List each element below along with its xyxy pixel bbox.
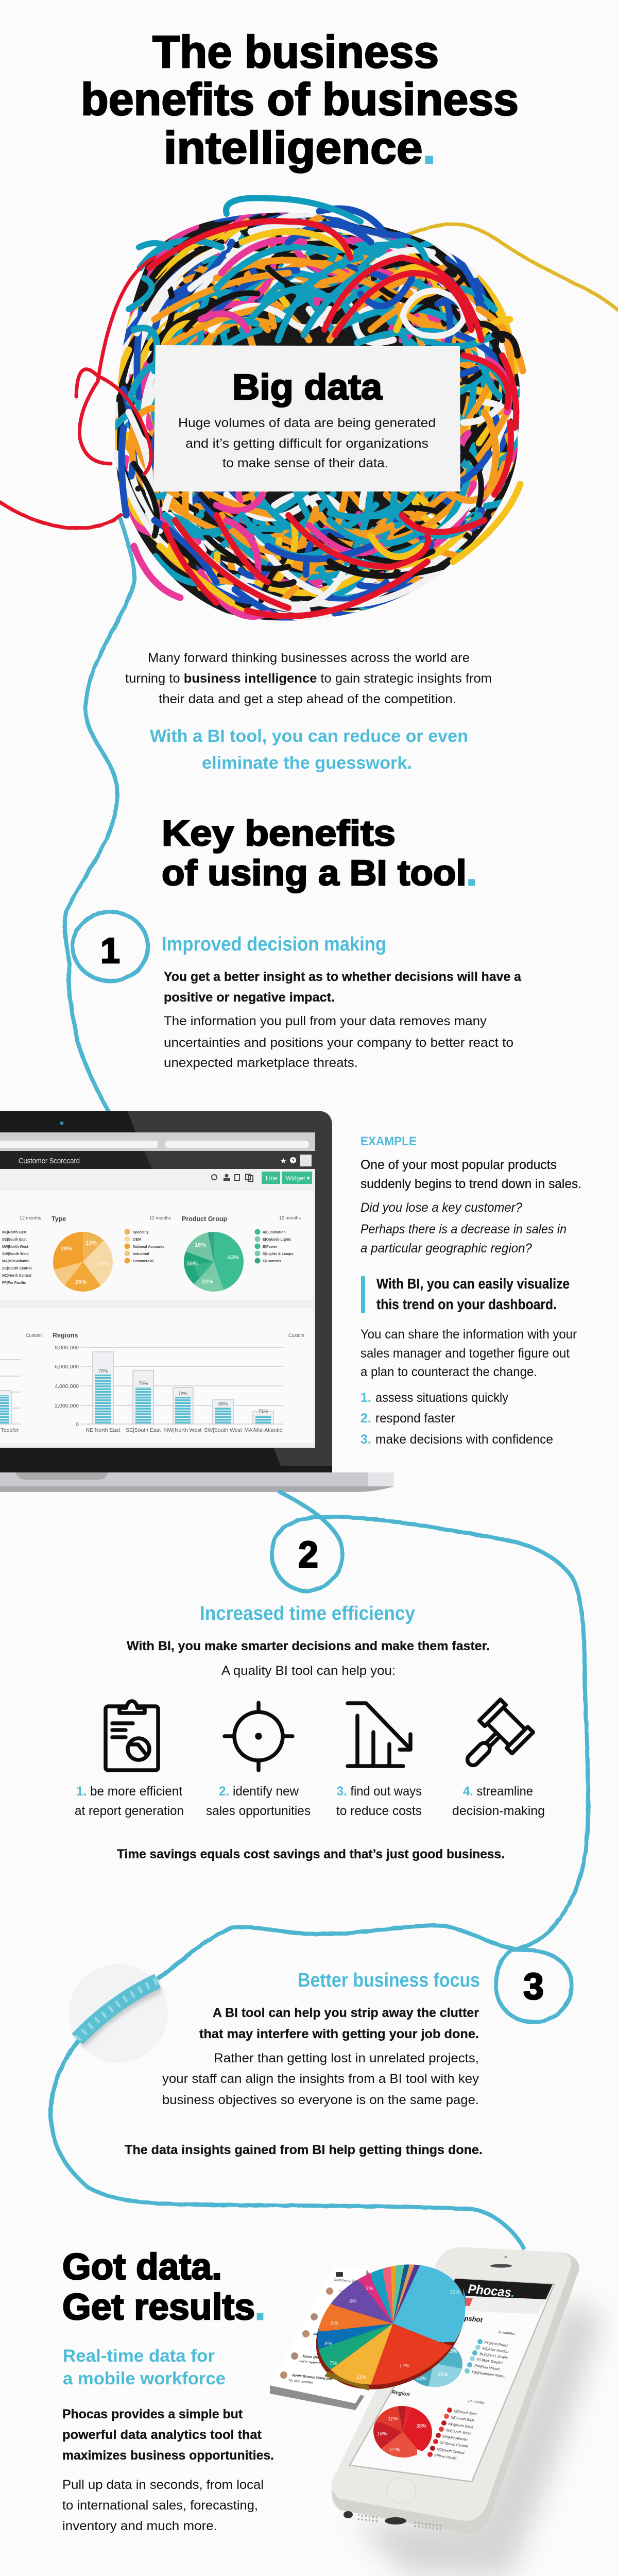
teal legend on phone: RT|Rick Toepfer <box>477 2358 503 2365</box>
dashboard panel: regions bar chart: NE|North East <box>86 1427 121 1433</box>
benefit 2 text: Increased time efficiency <box>200 1603 415 1624</box>
teal string: laptop through loop 2 to loop 3 <box>158 1491 588 2022</box>
pie: product group: 16% <box>195 1242 206 1248</box>
comments card <box>270 2267 372 2410</box>
legend: type: Industrial <box>133 1252 149 1256</box>
teal pie on phone <box>413 2346 462 2387</box>
numbered list <box>360 1391 553 1447</box>
highlight callout: this trend on your dashboard. <box>376 1296 557 1312</box>
red pie on phone <box>373 2406 432 2458</box>
phone shadow <box>355 2298 603 2576</box>
benefit 1 text <box>162 934 522 1070</box>
pie: type: 25% <box>75 1279 87 1285</box>
example column: sales manager and together figure out <box>360 1346 570 1361</box>
dashboard panel: regions bar chart: 65% <box>218 1401 228 1406</box>
closing statement: The data insights gained from BI help getting things done. <box>125 2143 483 2157</box>
legend: type: OEM <box>133 1238 141 1242</box>
benefit 2 text <box>127 1603 490 1678</box>
heading: got data: Got data. <box>62 2247 222 2287</box>
region list: SW|South West <box>2 1252 29 1256</box>
teal pie on phone: 25% <box>447 2349 457 2354</box>
example column: Did you lose a key customer? <box>360 1200 522 1215</box>
highlight callout <box>361 1276 570 1313</box>
intro paragraph: turning to business intelligence to gain strategic insights from <box>125 671 492 686</box>
number 3: 3 <box>523 1966 544 2007</box>
paper card: big data <box>153 345 460 492</box>
pie: type: 13% <box>85 1240 97 1246</box>
title: intelligence. <box>164 122 436 173</box>
legend: product group: B|Power <box>263 1245 277 1249</box>
laptop base <box>0 1472 394 1492</box>
card heading: Big data <box>232 367 383 407</box>
comments card: Jamie Brooks Good job <box>291 2374 332 2381</box>
example column: One of your most popular products <box>360 1158 557 1172</box>
comments card: Write a comment <box>339 2290 367 2295</box>
laptop lid <box>0 1111 332 1472</box>
icon: declining chart <box>348 1703 410 1766</box>
dashboard panel: regions bar chart: Toepfer <box>1 1427 19 1433</box>
numbered list: assess situations quickly <box>375 1391 508 1405</box>
card text: and it’s getting difficult for organizations <box>185 436 428 451</box>
yarn strands <box>116 209 523 616</box>
teal legend on phone: BLE|Bert L Evans <box>479 2352 508 2360</box>
example column: a particular geographic region? <box>360 1241 532 1256</box>
phocas description: to international sales, forecasting, <box>62 2498 258 2513</box>
comments card: we’re behind <box>299 2360 320 2365</box>
dashboard panel: pies: Type <box>52 1215 66 1223</box>
legend: product group: C|Controls <box>263 1260 281 1263</box>
icon captions <box>75 1784 545 1818</box>
red legend on phone: NC|North Central <box>437 2448 465 2455</box>
icon captions: to reduce costs <box>336 1804 422 1818</box>
benefit 1 text: positive or negative impact. <box>164 990 335 1005</box>
pie: product group: 16% <box>186 1261 198 1267</box>
red legend on phone: NE|North East <box>454 2410 477 2416</box>
dashboard panel: regions bar chart <box>0 1308 313 1443</box>
teal pie on phone: 23% <box>437 2372 448 2378</box>
phone header: apshot <box>460 2314 483 2324</box>
legend: type <box>125 1229 164 1263</box>
benefit 3 text: Rather than getting lost in unrelated projects, <box>214 2051 479 2065</box>
3D pie chart: 17% <box>399 2363 409 2369</box>
dashboard panel: regions bar chart: NW|North West <box>164 1427 201 1433</box>
phocas description: powerful data analytics tool that <box>62 2428 262 2442</box>
teal legend on phone <box>465 2330 516 2379</box>
heading: got data <box>62 2247 265 2328</box>
example column <box>360 1134 581 1447</box>
screen background <box>0 1187 315 1448</box>
time savings statement: Time savings equals cost savings and that’s just good business. <box>117 1847 505 1861</box>
example column: a plan to counteract the change. <box>360 1365 537 1379</box>
red pie on phone: 35% <box>416 2424 426 2429</box>
highlight callout: With BI, you can easily visualize <box>376 1276 570 1292</box>
pie: type: 26% <box>98 1261 109 1267</box>
icon captions: at report generation <box>75 1804 184 1818</box>
example column: Perhaps there is a decrease in sales in <box>360 1222 566 1236</box>
3D pie chart: 6% <box>349 2299 357 2304</box>
3D pie chart: 7% <box>330 2361 337 2366</box>
icon captions: 4. streamline <box>463 1784 533 1799</box>
benefit 3 text: Better business focus <box>298 1970 480 1991</box>
browser chrome <box>0 1132 315 1151</box>
subheading: mobile workforce <box>63 2346 226 2388</box>
dashboard panel: regions bar chart: 4,000,000 <box>55 1383 79 1389</box>
phone <box>331 2247 603 2576</box>
region list: FP|Far Pacific <box>2 1281 26 1285</box>
comments card: Tim L. <box>323 2314 334 2319</box>
red pie on phone: 27% <box>389 2447 400 2453</box>
icon captions: 3. find out ways <box>337 1784 422 1799</box>
number 1 loop: 1 <box>100 930 120 971</box>
ball base <box>115 213 520 620</box>
example column: You can share the information with your <box>360 1327 577 1342</box>
dashboard panel: regions bar chart: SW|South West <box>204 1427 242 1433</box>
region list: NW|North West <box>2 1245 28 1249</box>
dashboard panel: regions bar chart: 8,000,000 <box>55 1345 79 1351</box>
region list: MA|Mid-Atlantic <box>2 1260 29 1263</box>
dashboard panel: regions bar chart: 2,000,000 <box>55 1403 79 1409</box>
dashboard panel: pies: Product Group <box>182 1215 228 1223</box>
laptop <box>0 1111 394 1492</box>
benefit 3 text <box>162 1970 480 2107</box>
card text: Huge volumes of data are being generated <box>178 416 436 430</box>
region list: SE|South East <box>2 1238 27 1242</box>
benefit 1 text: unexpected marketplace threats. <box>164 1056 358 1070</box>
dashboard panel: regions bar chart: Custom <box>288 1333 304 1338</box>
legend: type: National Accounts <box>133 1245 164 1249</box>
phone: Region <box>391 2389 410 2398</box>
teal legend on phone: PM|Paul Magee <box>474 2364 500 2371</box>
legend: type: Specialty <box>133 1231 149 1234</box>
phone screen <box>350 2279 554 2482</box>
icon captions: 2. identify new <box>219 1784 299 1799</box>
teal statement <box>150 726 468 773</box>
toolbar: Widget ▾ <box>286 1175 310 1182</box>
toolbar: Line <box>266 1175 278 1182</box>
phocas description <box>62 2407 274 2533</box>
pie: type <box>53 1232 113 1292</box>
benefit 1 text: uncertainties and positions your company to better react to <box>164 1036 513 1050</box>
numbered list: respond faster <box>375 1411 455 1426</box>
phone body <box>332 2247 579 2534</box>
number 1 loop <box>73 912 148 981</box>
legend: product group <box>254 1229 294 1263</box>
phone header <box>440 2279 553 2324</box>
3D pie chart: 6% <box>331 2320 338 2326</box>
benefit 3 text: business objectives so everyone is on the same page. <box>162 2093 479 2107</box>
yarn ball <box>0 195 618 620</box>
heading: key benefits <box>162 813 477 893</box>
numbered list: 2. <box>360 1411 371 1426</box>
red legend on phone <box>427 2408 477 2461</box>
dashboard panel: pies: 12 months <box>279 1215 301 1221</box>
red legend on phone: SE|South East <box>451 2416 475 2422</box>
icon captions: sales opportunities <box>206 1804 311 1818</box>
icon: gavel <box>453 1700 533 1780</box>
benefit 2 text: A quality BI tool can help you: <box>221 1664 396 1678</box>
dashboard panel: regions bar chart: 72% <box>178 1391 187 1396</box>
comments card: Jamie <box>313 2332 323 2337</box>
dashboard panel: regions bar chart: SE|South East <box>126 1427 161 1433</box>
3D pie chart <box>316 2264 466 2391</box>
region list <box>2 1231 32 1285</box>
benefit 2 text: With BI, you make smarter decisions and make them faster. <box>127 1639 490 1653</box>
region list: NC|North Central <box>2 1274 31 1278</box>
benefit 1 text: You get a better insight as to whether decisions will have a <box>164 970 522 984</box>
example column: suddenly begins to trend down in sales. <box>360 1177 581 1191</box>
comments card: for this quarter! <box>289 2379 313 2385</box>
numbered list: make decisions with confidence <box>375 1432 553 1447</box>
red legend on phone: MA|Mid-Atlantic <box>442 2435 468 2442</box>
dashboard panel: pies: 12 months <box>20 1215 42 1221</box>
3D pie chart: 8% <box>324 2341 332 2347</box>
phone: 12 months <box>468 2399 485 2405</box>
dashboard panel: regions bar chart: Custom <box>26 1333 42 1338</box>
dashboard panel: regions bar chart: 70% <box>98 1368 108 1374</box>
intro paragraph: Many forward thinking businesses across the world are <box>148 651 470 665</box>
benefit 3 text: that may interfere with getting your job done. <box>199 2027 479 2041</box>
heading: got data: Get results. <box>62 2287 265 2328</box>
benefit 3 text: A BI tool can help you strip away the clutter <box>213 2006 479 2020</box>
numbered list: 1. <box>360 1391 371 1405</box>
title: benefits of business <box>81 74 519 125</box>
app header <box>0 1151 315 1169</box>
red legend on phone: FP|Far Pacific <box>434 2454 457 2461</box>
dashboard panel: regions bar chart: 70% <box>139 1381 148 1386</box>
dense yarn fill <box>115 212 520 620</box>
phone header: Phocas. <box>467 2282 516 2300</box>
phocas description: Phocas provides a simple but <box>62 2407 243 2421</box>
teal pie on phone: 14% <box>416 2376 426 2382</box>
numbered list: 3. <box>360 1432 371 1447</box>
icon: clipboard report <box>106 1701 158 1770</box>
phocas description: inventory and much more. <box>62 2519 217 2533</box>
benefit 1 text: Improved decision making <box>162 934 386 955</box>
card text: to make sense of their data. <box>222 456 388 470</box>
pie: product group <box>184 1232 244 1292</box>
app header: Customer Scorecard <box>19 1157 80 1165</box>
3D pie chart: 11% <box>356 2375 366 2380</box>
app header: ★ <box>280 1157 287 1165</box>
intro paragraph <box>125 651 492 706</box>
icon captions: 1. be more efficient <box>76 1784 182 1799</box>
title <box>81 26 519 173</box>
legend: type: Commercial <box>133 1260 153 1263</box>
title: The business <box>152 26 439 77</box>
number 2: 2 <box>298 1534 318 1575</box>
card text <box>178 416 436 470</box>
legend: product group: D|Lights & Lamps <box>263 1252 294 1256</box>
yarn tails <box>0 224 618 528</box>
dashboard panel: regions bar chart: Regions <box>53 1332 78 1339</box>
pie: product group: 22% <box>202 1279 213 1285</box>
dashboard panel: regions bar chart: 0 <box>76 1421 79 1428</box>
subheading: mobile workforce: Real-time data for <box>63 2346 215 2366</box>
teal string: ball to laptop <box>65 515 134 1113</box>
toolbar <box>0 1169 315 1187</box>
phone hardware <box>344 2256 512 2530</box>
3D pie chart: 3% <box>366 2286 373 2292</box>
comments card: Comments (4) <box>334 2278 357 2283</box>
region list: SC|South Central <box>2 1267 32 1270</box>
pie: type: 28% <box>61 1246 72 1252</box>
teal string: rope to phone <box>50 2040 524 2249</box>
phocas description: maximizes business opportunities. <box>62 2448 274 2463</box>
phocas description: Pull up data in seconds, from local <box>62 2478 264 2492</box>
heading: key benefits: Key benefits <box>162 813 396 853</box>
teal legend on phone: HM|Huntmore Math... <box>472 2370 506 2379</box>
pie: product group: 43% <box>228 1255 239 1261</box>
dashboard panel: regions bar chart: MA|Mid-Atlantic <box>244 1427 282 1433</box>
benefit 3 text: your staff can align the insights from a BI tool with key <box>162 2072 479 2086</box>
red legend on phone: SW|South West <box>445 2429 471 2436</box>
dashboard panel: pies: 12 months <box>149 1215 171 1221</box>
intro paragraph: their data and get a step ahead of the competition. <box>159 692 456 706</box>
teal statement: With a BI tool, you can reduce or even <box>150 726 468 746</box>
teal legend on phone: 12 months <box>498 2330 516 2336</box>
magnified rope <box>69 1964 168 2063</box>
red legend on phone: NW|North West <box>448 2422 474 2430</box>
red legend on phone: SC|South Central <box>440 2441 468 2449</box>
teal legend on phone: AG|Alan Gordon <box>482 2347 509 2354</box>
icon captions: decision-making <box>452 1804 545 1818</box>
legend: product group: A|Lumination <box>263 1231 286 1234</box>
dashboard panel: regions bar chart: 6,000,000 <box>55 1364 79 1370</box>
subheading: mobile workforce: a mobile workforce <box>63 2369 226 2388</box>
dashboard panel: regions bar chart: 71% <box>259 1409 268 1414</box>
app header: ? <box>291 1158 295 1164</box>
region list: NE|North East <box>2 1231 27 1234</box>
red pie on phone: 11% <box>388 2416 398 2422</box>
dashboard panel: pies <box>0 1191 313 1300</box>
heading: key benefits: of using a BI tool . <box>162 853 477 893</box>
3D pie chart: 32% <box>450 2290 460 2295</box>
teal statement: eliminate the guesswork. <box>202 753 412 773</box>
red pie on phone: 18% <box>377 2431 387 2437</box>
teal legend on phone: FP|Fred Priest <box>485 2341 508 2348</box>
benefit 1 text: The information you pull from your data removes many <box>164 1014 487 1028</box>
example column: EXAMPLE <box>360 1134 417 1148</box>
comments card: Jason Bird <box>302 2354 321 2360</box>
icon: target <box>225 1703 293 1770</box>
legend: product group: E|Outside Lights <box>263 1238 291 1242</box>
